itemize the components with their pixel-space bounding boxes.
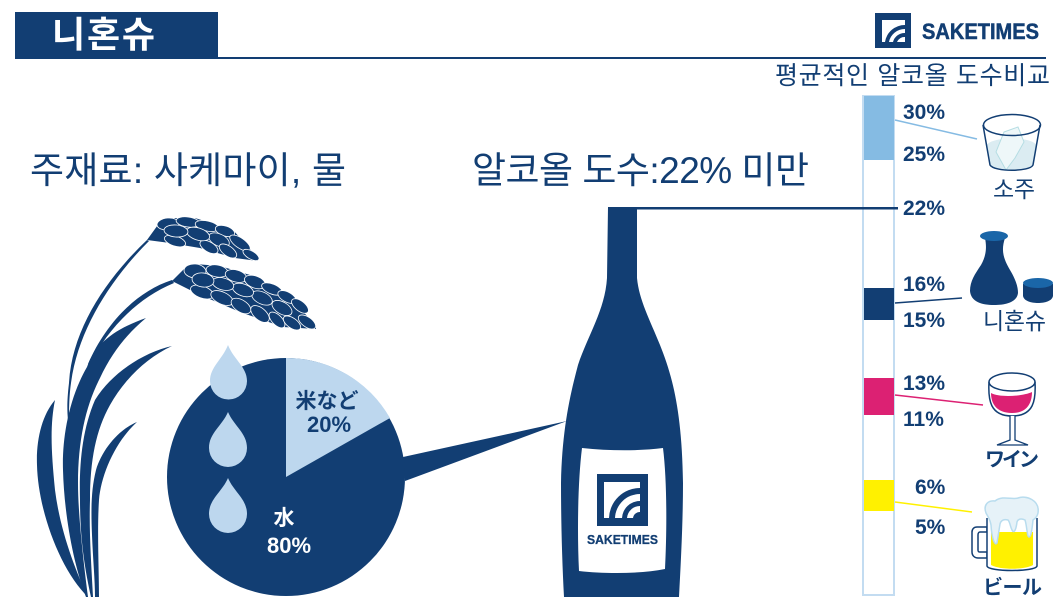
icon: rice panicle lower [172,263,318,333]
icon: beer mug [972,497,1038,570]
pointer wedge from pie to bottle [403,421,567,481]
pie chart: water 80%, rice 20%: 水 [274,502,294,532]
icon: sake bottle [561,207,683,597]
connector lines [895,120,983,512]
label: soju: 소주 [993,176,1035,202]
line: 22% marker [608,207,898,210]
icon: tokkuri and cup [970,231,1053,305]
percentage labels: 25% [903,143,945,166]
percentage labels: 16% [903,273,945,296]
header band [15,12,1046,59]
pie chart: water 80%, rice 20%: 80% [267,533,311,558]
label: beer: ビール [983,571,1042,600]
pie chart: water 80%, rice 20%: 米など [296,385,358,415]
pie chart: water 80%, rice 20%: 20% [307,412,351,437]
label: wine: ワイン [985,443,1039,472]
percentage labels: 30% [903,101,945,124]
percentage labels: 13% [903,372,945,395]
percentage labels: 11% [903,408,944,431]
label: nihonshu: 니혼슈 [983,308,1046,334]
heading: average alcohol comparison: 평균적인 알코올 도수비교 [775,62,1050,90]
logo: SAKETIMES: SAKETIMES [922,19,1039,44]
icon: rice panicle upper [147,215,261,263]
percentage labels: 15% [903,309,945,332]
percentage labels: 22% [903,197,945,220]
percentage labels [903,101,946,539]
scale bar [863,96,894,595]
header band: 니혼슈 [52,14,155,55]
icon: soju glass [983,114,1040,170]
icon: water drops [209,345,247,533]
heading: alcohol content: 알코올 도수:22% 미만 [472,150,809,191]
logo: SAKETIMES [875,13,1039,48]
heading: main ingredients: 주재료: 사케마이, 물 [30,150,346,191]
icon: wine glass [989,373,1035,445]
icon: rice plant [37,240,174,597]
percentage labels: 6% [915,476,946,499]
icon: sake bottle: SAKETIMES [587,532,658,547]
percentage labels: 5% [915,516,946,539]
pie chart: water 80%, rice 20% [167,358,405,596]
